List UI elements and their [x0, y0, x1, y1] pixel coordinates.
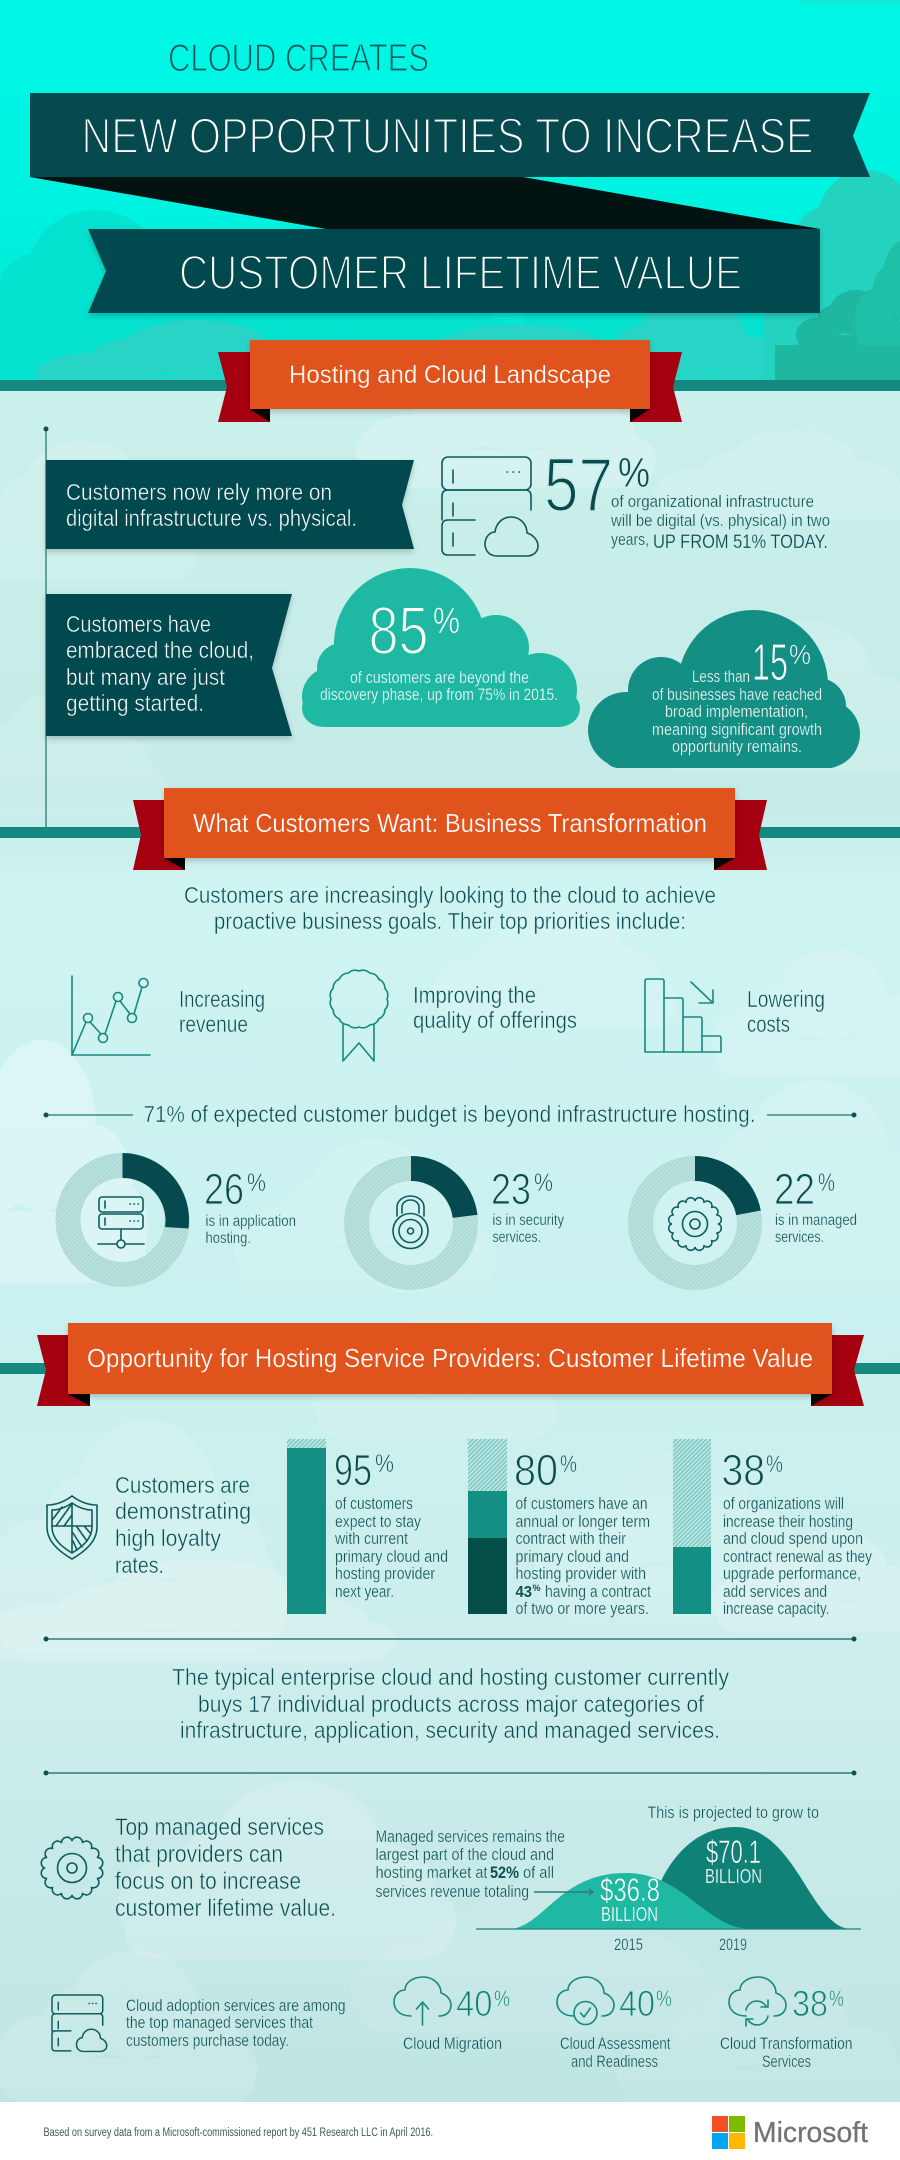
- text: managed services market: Managed services remains the: [376, 1827, 565, 1846]
- chart: market growth hills: [476, 1803, 861, 1954]
- managed services intro: [41, 1814, 336, 1922]
- bar stat: 80%: 43: [516, 1584, 532, 1601]
- banner: new opportunities: [30, 93, 870, 177]
- cloud: 85%: %: [433, 600, 460, 641]
- cloud: 15%: of businesses have reached: [652, 685, 822, 704]
- bar stat: 80%: %: [560, 1451, 577, 1478]
- band: digital infrastructure: Customers now rely more on: [66, 479, 332, 505]
- band: embraced the cloud: [46, 594, 292, 736]
- icon: cloud refresh: [729, 1977, 786, 2026]
- donut: application hosting 26%: [68, 1153, 296, 1274]
- managed services intro: customer lifetime value.: [115, 1895, 336, 1922]
- service: cloud assessment: Cloud Assessment: [560, 2034, 671, 2053]
- priority: lowering costs: [645, 979, 825, 1052]
- cloud: 85%: of customers are beyond the: [350, 668, 529, 687]
- icon: gear: [41, 1837, 103, 1899]
- band: embraced the cloud: Customers have: [66, 611, 211, 637]
- priority: quality of offerings: Improving the: [413, 982, 536, 1008]
- divider heading: 71%: 71% of expected customer budget is beyond infrastructure hosting.: [144, 1101, 756, 1127]
- service: cloud transformation: Cloud Transformation: [720, 2034, 852, 2053]
- service: cloud assessment: and Readiness: [571, 2052, 658, 2071]
- section ribbon: what customers want: [133, 788, 767, 870]
- icon: falling bars: [645, 979, 721, 1052]
- priority: quality of offerings: [330, 970, 577, 1061]
- priority: lowering costs: Lowering: [747, 986, 825, 1012]
- section ribbon: opportunity: Opportunity for Hosting Service Providers: Customer Lifetime Value: [87, 1343, 813, 1373]
- bar stat: 80%: 80: [514, 1446, 558, 1495]
- intro text: [184, 882, 716, 934]
- chart: market growth hills: $36.8: [600, 1872, 660, 1908]
- service: cloud transformation: [720, 1977, 852, 2071]
- icon: cloud upload: [394, 1977, 451, 2025]
- priority: increasing revenue: [72, 976, 265, 1055]
- cloud adoption text: the top managed services that: [126, 2013, 313, 2032]
- chart: market growth hills: 2015: [614, 1935, 643, 1954]
- cloud adoption text: Cloud adoption services are among: [126, 1996, 346, 2015]
- bar stat: 38%: add services and: [723, 1583, 827, 1601]
- statement: 17 products: buys 17 individual products across major categories of: [198, 1691, 705, 1717]
- stat: 57%: %: [618, 449, 650, 496]
- intro text: Customers are increasingly looking to the cloud to achieve: [184, 882, 716, 908]
- bar stat: 95%: [287, 1439, 448, 1614]
- donut: managed services 22%: services.: [775, 1229, 824, 1246]
- icon: shield: [47, 1496, 97, 1559]
- donut: managed services 22%: [640, 1156, 857, 1278]
- cloud: 15%: 15: [752, 634, 788, 692]
- stat: 57%: of organizational infrastructure: [611, 492, 814, 511]
- title kicker: CLOUD CREATES: [168, 37, 429, 80]
- loyalty intro: high loyalty: [115, 1525, 221, 1551]
- section ribbon: hosting and cloud landscape: Hosting and Cloud Landscape: [289, 361, 611, 389]
- icon: padlock: [393, 1196, 428, 1248]
- donut: security services 23%: %: [534, 1169, 553, 1197]
- donut: application hosting 26%: %: [247, 1169, 266, 1197]
- managed services intro: Top managed services: [115, 1814, 324, 1841]
- text: managed services market: 52%: [490, 1863, 519, 1882]
- stat: 57%: 57: [544, 443, 613, 528]
- icon: server with cloud: [442, 457, 538, 556]
- chart: market growth hills: BILLION: [705, 1866, 762, 1888]
- cloud: 85%: discovery phase, up from 75% in 2015.: [320, 685, 558, 704]
- logo: Microsoft: Microsoft: [753, 2117, 868, 2149]
- section ribbon: opportunity: [37, 1323, 864, 1406]
- donut: managed services 22%: %: [818, 1169, 835, 1197]
- timeline: [44, 426, 48, 827]
- bar stat: 80%: of customers have an: [516, 1495, 648, 1513]
- cloud adoption text: [52, 1995, 345, 2051]
- bar stat: 80%: having a contract: [545, 1583, 651, 1601]
- stat: 57%: will be digital (vs. physical) in two: [610, 511, 830, 530]
- bar stat: 80%: %: [532, 1583, 540, 1593]
- cloud: 15%: %: [789, 639, 811, 670]
- cloud: 15%: meaning significant growth: [652, 720, 822, 739]
- service: cloud assessment: 40: [619, 1983, 655, 2024]
- chart: market growth hills: BILLION: [601, 1904, 658, 1926]
- donut: application hosting 26%: hosting.: [206, 1230, 251, 1247]
- donut: security services 23%: services.: [492, 1229, 541, 1246]
- managed services intro: that providers can: [115, 1841, 283, 1868]
- service: cloud transformation: %: [829, 1986, 844, 2011]
- service: cloud transformation: 38: [792, 1983, 828, 2024]
- cloud: 15%: opportunity remains.: [672, 737, 802, 756]
- cloud: 15%: broad implementation,: [665, 702, 808, 721]
- statement: 17 products: infrastructure, application, security and managed services.: [180, 1717, 720, 1743]
- text: managed services market: [376, 1827, 565, 1901]
- bar stat: 95%: primary cloud and: [335, 1548, 448, 1566]
- bar stat: 38%: increase capacity.: [723, 1600, 830, 1618]
- bar stat: 80%: [468, 1439, 651, 1618]
- bar stat: 80%: of two or more years.: [516, 1600, 649, 1618]
- text: managed services market: services revenue totaling: [376, 1882, 529, 1901]
- bar stat: 38%: of organizations will: [723, 1495, 844, 1513]
- loyalty intro: rates.: [115, 1552, 164, 1578]
- cloud: 85%: 85: [368, 593, 428, 669]
- donut: security services 23%: [356, 1156, 564, 1278]
- title banner: [30, 93, 870, 313]
- bar stat: 95%: of customers: [335, 1495, 413, 1513]
- cloud adoption text: customers purchase today.: [126, 2031, 289, 2050]
- band: embraced the cloud: embraced the cloud,: [66, 637, 254, 663]
- section ribbon: what customers want: What Customers Want: Business Transformation: [193, 808, 707, 838]
- footer: Based on survey data from a Microsoft-commissioned report by 451 Research LLC in April 2016.: [44, 2127, 433, 2139]
- priority: lowering costs: costs: [747, 1011, 790, 1037]
- band: digital infrastructure: digital infrastructure vs. physical.: [66, 505, 357, 531]
- stat: 57%: UP FROM 51% TODAY.: [653, 532, 828, 553]
- icon: cloud check: [557, 1977, 614, 2024]
- icon: server with cloud: [52, 1995, 107, 2051]
- priority: increasing revenue: revenue: [179, 1011, 248, 1037]
- statement: 17 products: [172, 1664, 729, 1743]
- cloud: 15%: [588, 610, 860, 768]
- bar stat: 80%: primary cloud and: [516, 1548, 629, 1566]
- band: embraced the cloud: getting started.: [66, 690, 204, 716]
- bar stat: 95%: with current: [334, 1530, 408, 1548]
- icon: line chart: [72, 976, 150, 1055]
- loyalty intro: demonstrating: [115, 1498, 251, 1524]
- bar stat: 38%: 38: [722, 1446, 765, 1495]
- icon: server node: [98, 1197, 144, 1248]
- service: cloud migration: %: [494, 1986, 510, 2011]
- banner: customer lifetime value: [88, 229, 820, 313]
- stat: 57%: [544, 443, 830, 553]
- service: cloud transformation: Services: [762, 2052, 811, 2071]
- bar stat: 38%: upgrade performance,: [723, 1565, 861, 1583]
- service: cloud migration: 40: [456, 1983, 492, 2024]
- donut: managed services 22%: 22: [774, 1165, 815, 1214]
- bar stat: 38%: %: [766, 1451, 783, 1478]
- priority: quality of offerings: quality of offerings: [413, 1007, 577, 1033]
- header background: [0, 0, 900, 402]
- text: managed services market: of all: [523, 1863, 554, 1882]
- service: cloud assessment: [557, 1977, 672, 2071]
- stat: 57%: years,: [611, 530, 649, 549]
- donut: application hosting 26%: is in application: [206, 1213, 296, 1230]
- loyalty intro: [47, 1472, 251, 1578]
- bar stat: 38%: contract renewal as they: [723, 1548, 873, 1566]
- chart: market growth hills: $70.1: [706, 1834, 761, 1870]
- bar stat: 38%: increase their hosting: [723, 1513, 853, 1531]
- bar stat: 80%: annual or longer term: [516, 1513, 650, 1531]
- cloud: 85%: [302, 568, 580, 727]
- service: cloud migration: Cloud Migration: [403, 2034, 502, 2053]
- bar stat: 95%: 95: [334, 1446, 372, 1495]
- icon: gear: [669, 1198, 721, 1250]
- chart: market growth hills: This is projected to grow to: [648, 1803, 819, 1822]
- bar stat: 95%: %: [375, 1450, 394, 1478]
- priority: increasing revenue: Increasing: [179, 986, 265, 1012]
- band: digital infrastructure: [46, 460, 414, 549]
- managed services intro: focus on to increase: [115, 1868, 301, 1895]
- bar stat: 95%: expect to stay: [335, 1513, 422, 1531]
- bar stat: 95%: hosting provider: [335, 1565, 435, 1583]
- intro text: proactive business goals. Their top priorities include:: [214, 908, 686, 934]
- bar stat: 80%: hosting provider with: [516, 1565, 646, 1583]
- service: cloud migration: [394, 1977, 510, 2053]
- bar stat: 38%: [673, 1439, 873, 1618]
- stripes: [0, 380, 900, 391]
- band: embraced the cloud: but many are just: [66, 664, 226, 690]
- banner: customer lifetime value: CUSTOMER LIFETIME VALUE: [179, 247, 742, 300]
- donut: security services 23%: 23: [491, 1165, 531, 1214]
- donut: managed services 22%: is in managed: [775, 1212, 857, 1229]
- bar stat: 38%: and cloud spend upon: [723, 1530, 863, 1548]
- chart: market growth hills: 2019: [719, 1935, 747, 1954]
- text: managed services market: hosting market at: [376, 1863, 488, 1882]
- service: cloud assessment: %: [656, 1986, 672, 2011]
- icon: award ribbon: [330, 970, 388, 1061]
- donut: security services 23%: is in security: [492, 1212, 564, 1229]
- bar stat: 80%: contract with their: [516, 1530, 626, 1548]
- cloud: 15%: Less than: [692, 667, 750, 686]
- banner fold: [30, 177, 820, 229]
- loyalty intro: Customers are: [115, 1472, 250, 1498]
- donut: application hosting 26%: 26: [204, 1165, 244, 1214]
- section ribbon: hosting and cloud landscape: [218, 340, 682, 422]
- footer: [0, 2102, 900, 2160]
- arrow: [534, 1889, 593, 1895]
- text: managed services market: largest part of the cloud and: [376, 1845, 554, 1864]
- statement: 17 products: The typical enterprise cloud and hosting customer currently: [172, 1664, 729, 1690]
- bar stat: 95%: next year.: [335, 1583, 394, 1601]
